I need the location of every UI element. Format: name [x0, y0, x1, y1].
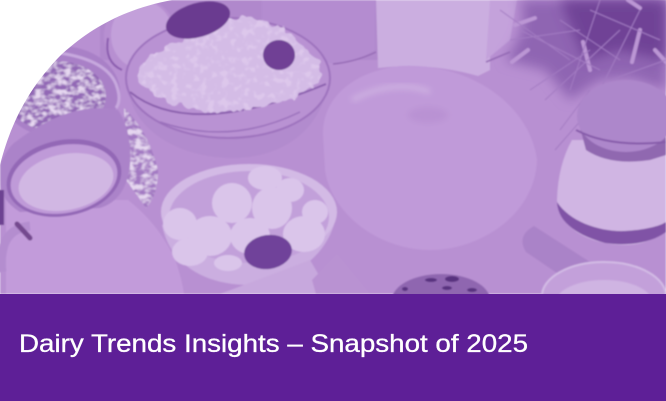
jug of milk [0, 108, 184, 294]
yogurt jar with lid [557, 80, 666, 245]
title: Dairy Trends Insights – Snapshot of 2025 [19, 330, 528, 358]
mozzarella bowl [161, 164, 337, 285]
oats glass column [124, 108, 158, 208]
hero: purple-tinted dairy photo illustration [0, 0, 666, 294]
cork [523, 226, 588, 272]
title band [0, 294, 666, 401]
cookie [392, 274, 490, 294]
cottage cheese bowl [124, 0, 332, 140]
wheat bunch [500, 0, 666, 150]
table background [0, 0, 666, 294]
cottage cheese [138, 16, 321, 112]
small lid top left [106, 4, 170, 71]
glass jars top [332, 0, 517, 76]
small glass jar [540, 260, 666, 294]
oats jar [15, 47, 121, 132]
leaf large [165, 0, 231, 40]
leaf small [263, 40, 295, 70]
small leaf [243, 234, 292, 270]
wooden box [222, 261, 318, 294]
cheese wheel [323, 66, 537, 250]
